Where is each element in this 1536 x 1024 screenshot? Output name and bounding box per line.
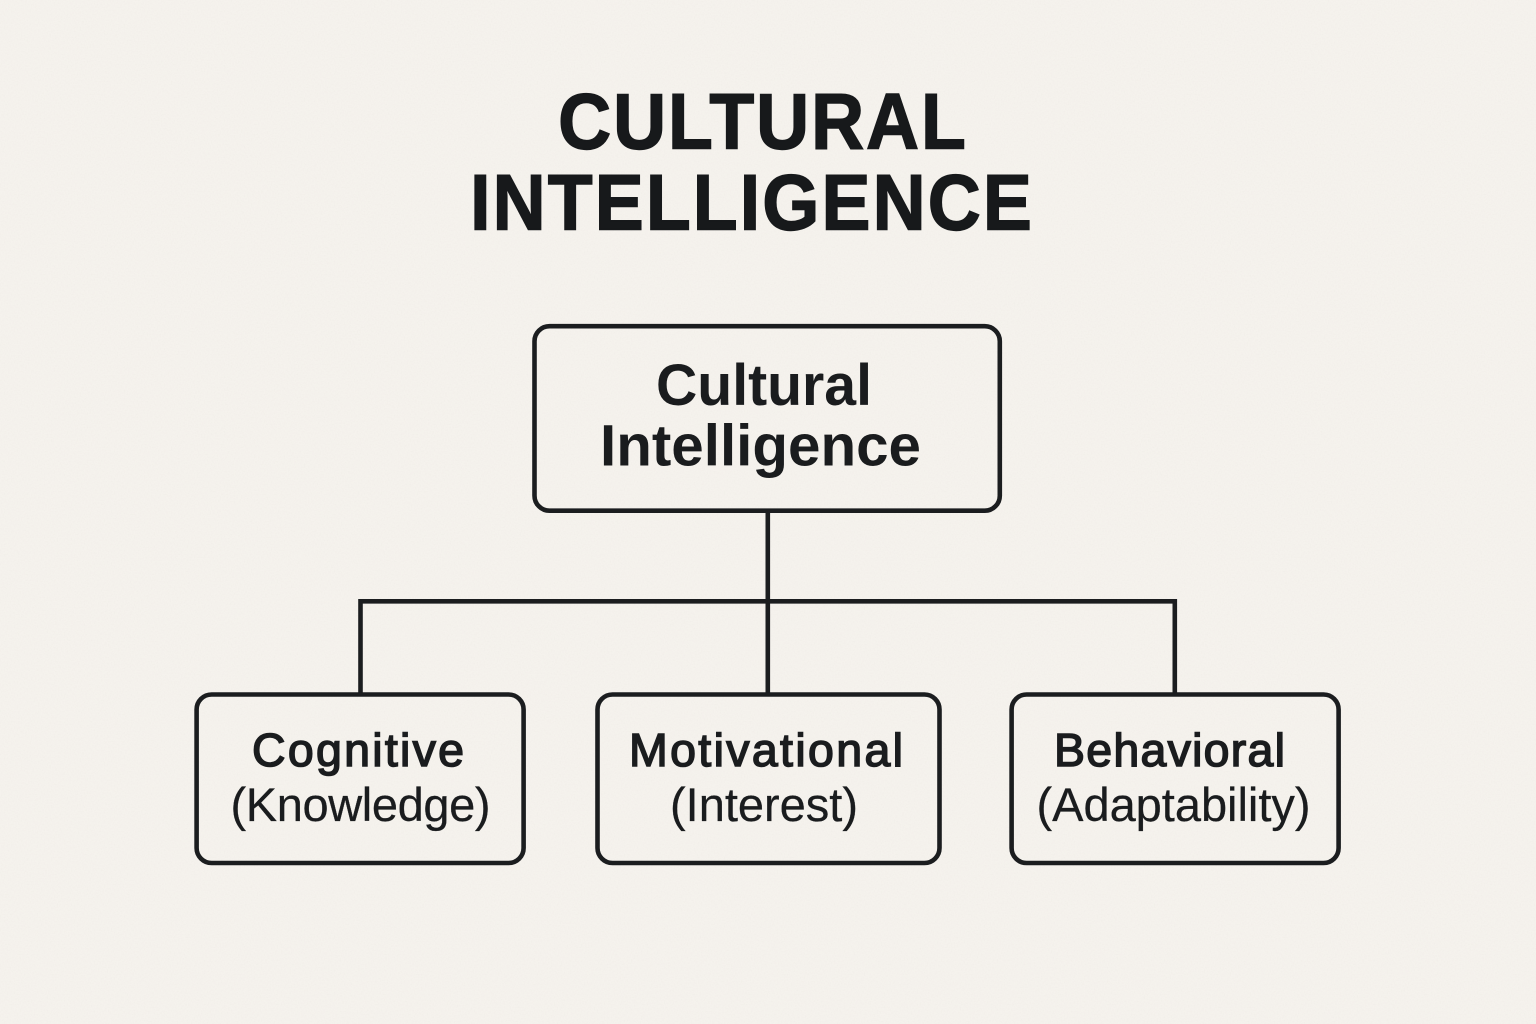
title (470, 78, 1032, 247)
panel: root box Cultural Intelligence (534, 326, 1000, 511)
connector lines (360, 510, 1175, 694)
panel: Cognitive box: Cognitive (252, 724, 464, 776)
panel: Motivational box (598, 694, 940, 863)
panel: root box Cultural Intelligence: Intelligence (600, 414, 921, 478)
panel: Cognitive box (197, 694, 524, 863)
panel: Behavioral box: Behavioral (1054, 724, 1285, 776)
title: CULTURAL (558, 78, 966, 166)
panel: Behavioral box: (Adaptability) (1036, 778, 1310, 831)
title: INTELLIGENCE (470, 159, 1032, 247)
panel: Motivational box: (Interest) (670, 778, 858, 831)
panel: Cognitive box: (Knowledge) (230, 778, 490, 831)
panel: root box Cultural Intelligence: Cultural (656, 353, 872, 418)
panel: Behavioral box (1012, 694, 1339, 863)
panel: Motivational box: Motivational (629, 724, 903, 776)
